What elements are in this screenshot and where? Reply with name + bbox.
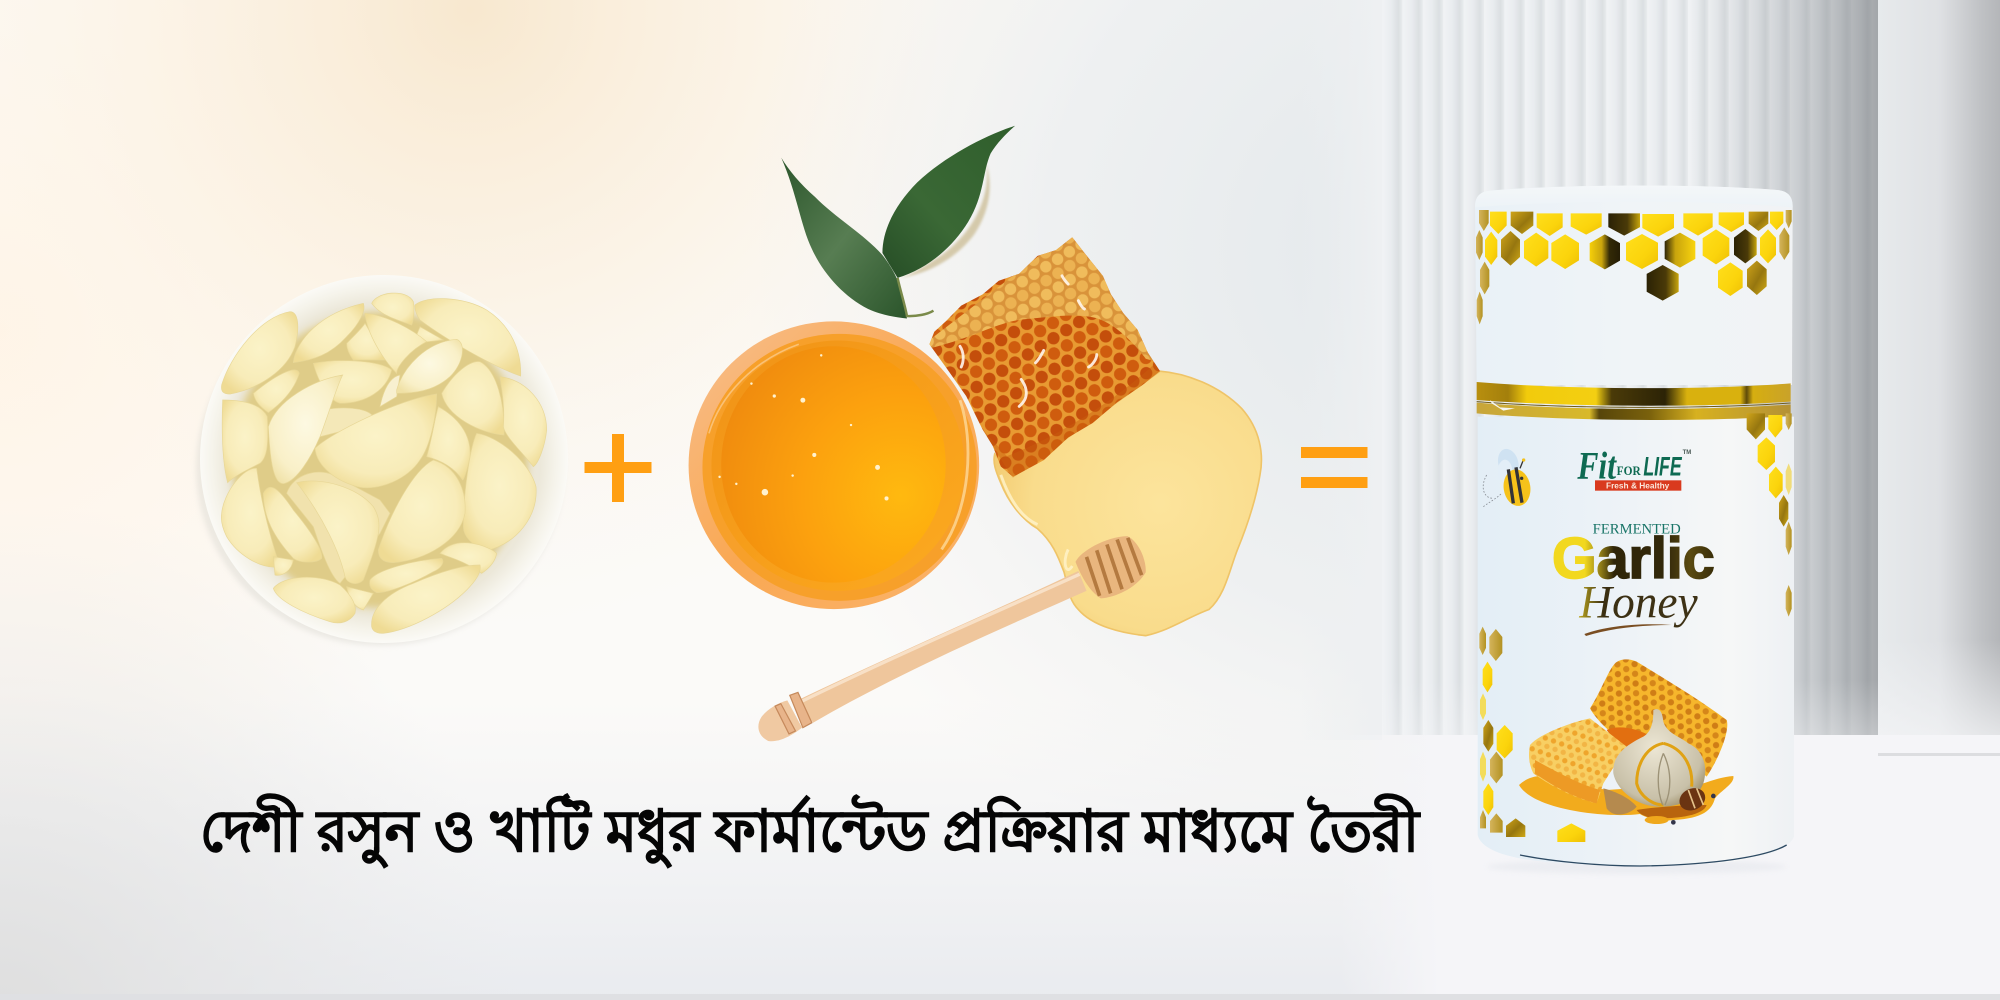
gold hexagons right side — [1747, 413, 1792, 617]
icon: bowl of peeled garlic — [196, 275, 568, 646]
brand logo — [1577, 443, 1691, 491]
leaves — [781, 126, 1015, 319]
icon: honey jar, honeycomb, leaves and dipper — [689, 126, 1261, 741]
bottle body — [1478, 417, 1794, 865]
bottle shadow — [1487, 859, 1787, 874]
brand logo: LIFE — [1643, 452, 1682, 482]
garlic bulb — [1613, 709, 1705, 807]
floor — [0, 735, 2000, 1000]
honeycomb back — [1590, 659, 1727, 777]
honey pool — [1519, 776, 1733, 820]
icon: bee — [1483, 447, 1533, 508]
garlic cloves — [221, 293, 547, 633]
product: garlic honey bottle — [1475, 186, 1794, 874]
honeycomb — [930, 237, 1160, 477]
brand logo: Fresh & Healthy — [1606, 481, 1670, 490]
dark honey under garlic — [1637, 805, 1707, 818]
gold foil band — [1477, 382, 1791, 420]
gold honeycomb hexagons top — [1476, 210, 1792, 324]
honey dipper — [758, 536, 1146, 741]
plus sign — [584, 434, 652, 502]
brand logo: FOR — [1617, 464, 1641, 478]
headline text: দেশী রসুন ও খাটি মধুর ফার্মান্টেড প্রক্রিয়ার মাধ্যমে তৈরী — [200, 793, 1421, 869]
brand logo: Fit — [1577, 443, 1617, 487]
equals sign — [1301, 447, 1368, 488]
product title — [1552, 521, 1715, 636]
product title: Honey — [1578, 576, 1698, 628]
fluted wall panel — [1300, 0, 1878, 740]
garlic clove skin — [1603, 788, 1637, 814]
bowl — [196, 275, 568, 646]
mini dipper — [1676, 784, 1709, 815]
right wall pillar — [1878, 0, 2000, 755]
row 3 — [1477, 261, 1767, 324]
product title: FERMENTED — [1593, 521, 1681, 537]
honey spill — [994, 371, 1261, 636]
row 1 — [1479, 210, 1792, 237]
row 2 — [1476, 227, 1789, 269]
honeycomb front — [1529, 718, 1627, 803]
bottle lid — [1475, 186, 1793, 385]
honey glints — [960, 276, 1097, 406]
honey spill highlight — [1001, 475, 1072, 570]
honey jar — [689, 321, 979, 609]
product title: Garlic — [1552, 527, 1715, 591]
product illustration: honeycomb and garlic — [1519, 659, 1733, 825]
brand logo: TM — [1683, 450, 1691, 456]
gold hexagons left side — [1479, 627, 1585, 842]
